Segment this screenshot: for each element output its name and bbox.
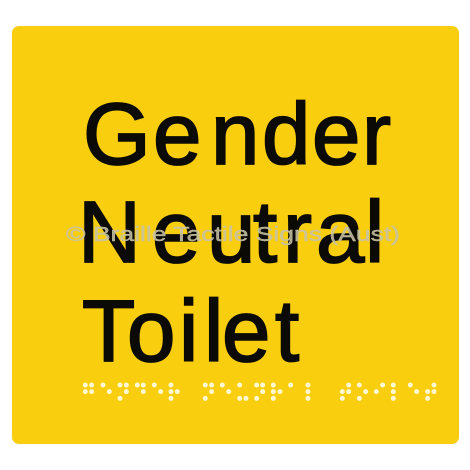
watermark: © Braille Tactile Signs (Aust) <box>66 223 400 246</box>
text: Toilet: Toilet <box>82 283 299 380</box>
braille word: Neutral <box>203 382 310 401</box>
heading: Gender Neutral Toilet <box>78 86 391 380</box>
braille word: Gender <box>83 382 180 401</box>
text: Gender: Gender <box>83 86 391 183</box>
braille word: Toilet <box>340 382 436 401</box>
text: Neutral: Neutral <box>78 184 384 281</box>
braille dots <box>83 382 436 401</box>
